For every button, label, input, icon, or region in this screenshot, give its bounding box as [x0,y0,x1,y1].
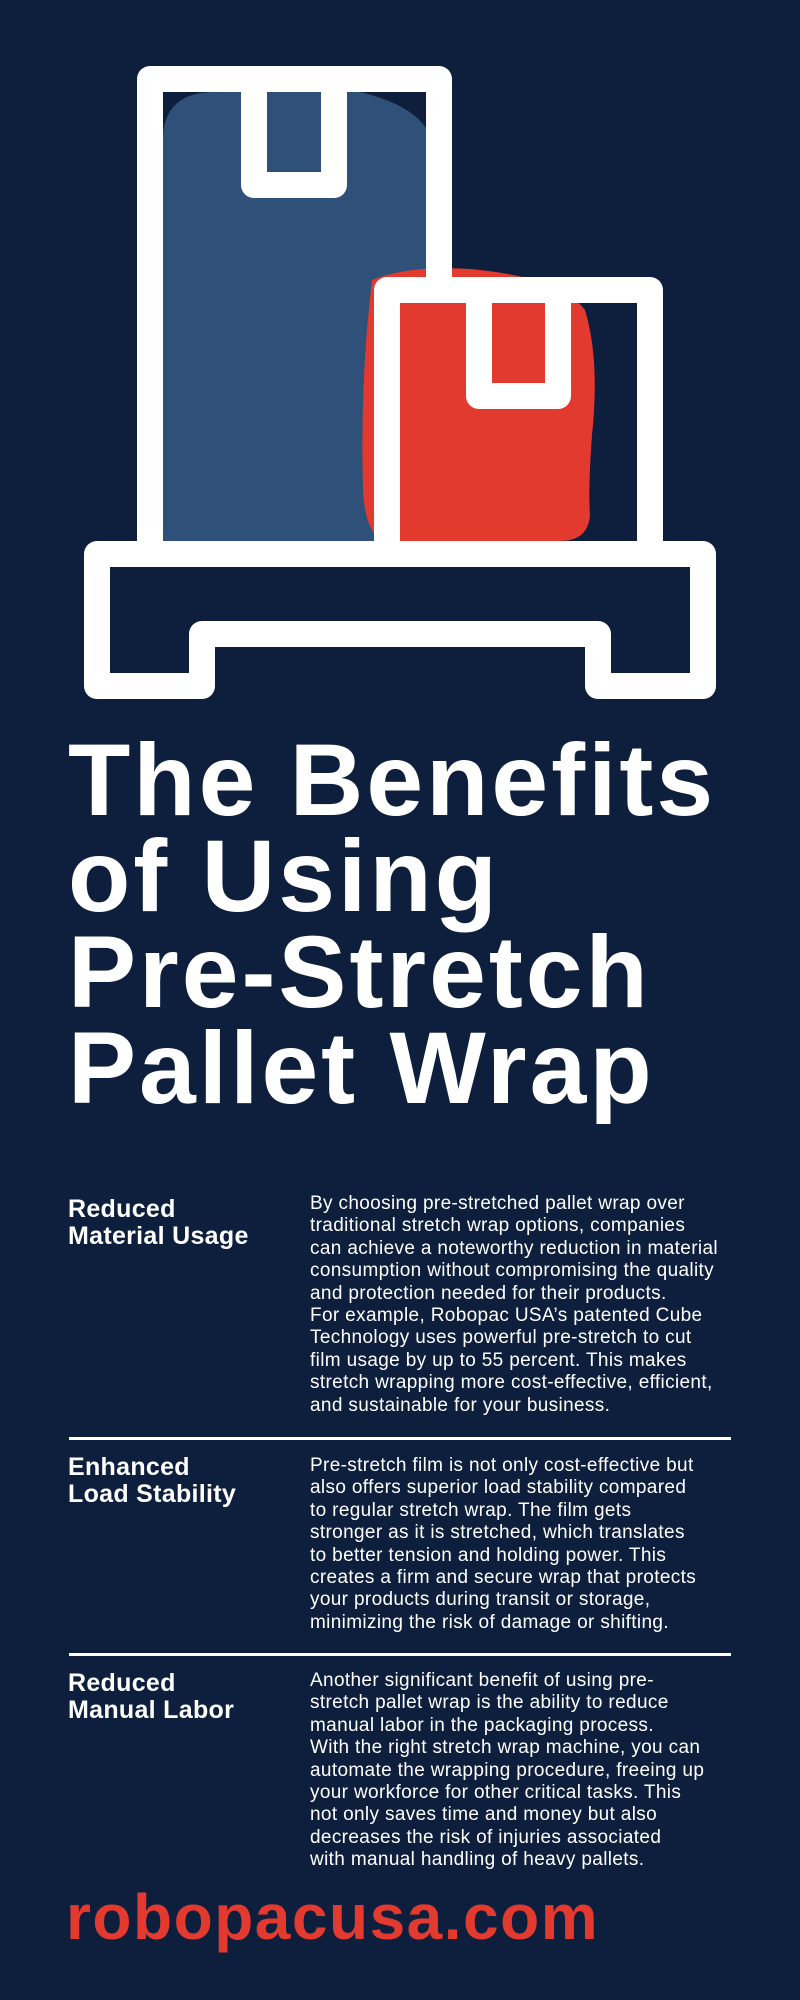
section 1 body: Technology uses powerful pre-stretch to cut [310,1327,692,1348]
section 1 body: By choosing pre-stretched pallet wrap over [310,1193,685,1214]
section 1 body: traditional stretch wrap options, companies [310,1215,685,1236]
section 3 body: not only saves time and money but also [310,1804,657,1825]
blue box fill [163,92,426,541]
section 2 body: creates a firm and secure wrap that protects [310,1567,696,1588]
section 1 body: stretch wrapping more cost-effective, efficient, [310,1372,713,1393]
title: Pre-Stretch [68,915,651,1029]
title [68,723,716,1125]
section 3 body: Another significant benefit of using pre- [310,1670,654,1691]
section 3 body: your workforce for other critical tasks. This [310,1782,681,1803]
section 3 body: automate the wrapping procedure, freeing up [310,1760,704,1781]
section 3 body: With the right stretch wrap machine, you can [310,1737,700,1758]
section 1 heading [68,1195,249,1250]
section 1 body: For example, Robopac USA’s patented Cube [310,1305,702,1326]
pallet outline [97,554,703,686]
section 3 body: decreases the risk of injuries associated [310,1827,661,1848]
section 1 body [310,1193,718,1416]
title: The Benefits [68,723,716,837]
tall box outline [150,79,439,554]
red box fill [362,268,595,541]
title: of Using [68,819,500,933]
section 3 heading [68,1669,234,1724]
section 3 heading: Reduced [68,1669,176,1697]
section 3 body: manual labor in the packaging process. [310,1715,654,1736]
section 2 body: minimizing the risk of damage or shifting. [310,1612,669,1633]
section 1 body: film usage by up to 55 percent. This makes [310,1350,687,1371]
section 2 body: stronger as it is stretched, which translates [310,1522,685,1543]
section 1 body: and protection needed for their products. [310,1283,667,1304]
section 1 body: consumption without compromising the quality [310,1260,714,1281]
section 1 heading: Material Usage [68,1222,249,1250]
section 3 body [310,1670,704,1870]
section 1 body: can achieve a noteworthy reduction in material [310,1238,718,1259]
section 2 body: also offers superior load stability compared [310,1477,686,1498]
section 1 heading: Reduced [68,1195,176,1223]
section 2 body: to better tension and holding power. This [310,1545,666,1566]
section 3 heading: Manual Labor [68,1696,234,1724]
section 2 body [310,1455,696,1633]
icon: pallet with boxes [84,66,716,699]
section 2 body: your products during transit or storage, [310,1589,650,1610]
section 3 body: stretch pallet wrap is the ability to reduce [310,1692,669,1713]
section 2 body: to regular stretch wrap. The film gets [310,1500,631,1521]
section 3 body: with manual handling of heavy pallets. [310,1849,644,1870]
section 2 body: Pre-stretch film is not only cost-effective but [310,1455,694,1476]
section 2 heading [68,1453,236,1508]
section 1 body: and sustainable for your business. [310,1395,610,1416]
website url: robopacusa.com [66,1881,599,1953]
section 2 heading: Load Stability [68,1480,236,1508]
section 2 heading: Enhanced [68,1453,190,1481]
title: Pallet Wrap [68,1011,655,1125]
short box outline [387,290,650,554]
